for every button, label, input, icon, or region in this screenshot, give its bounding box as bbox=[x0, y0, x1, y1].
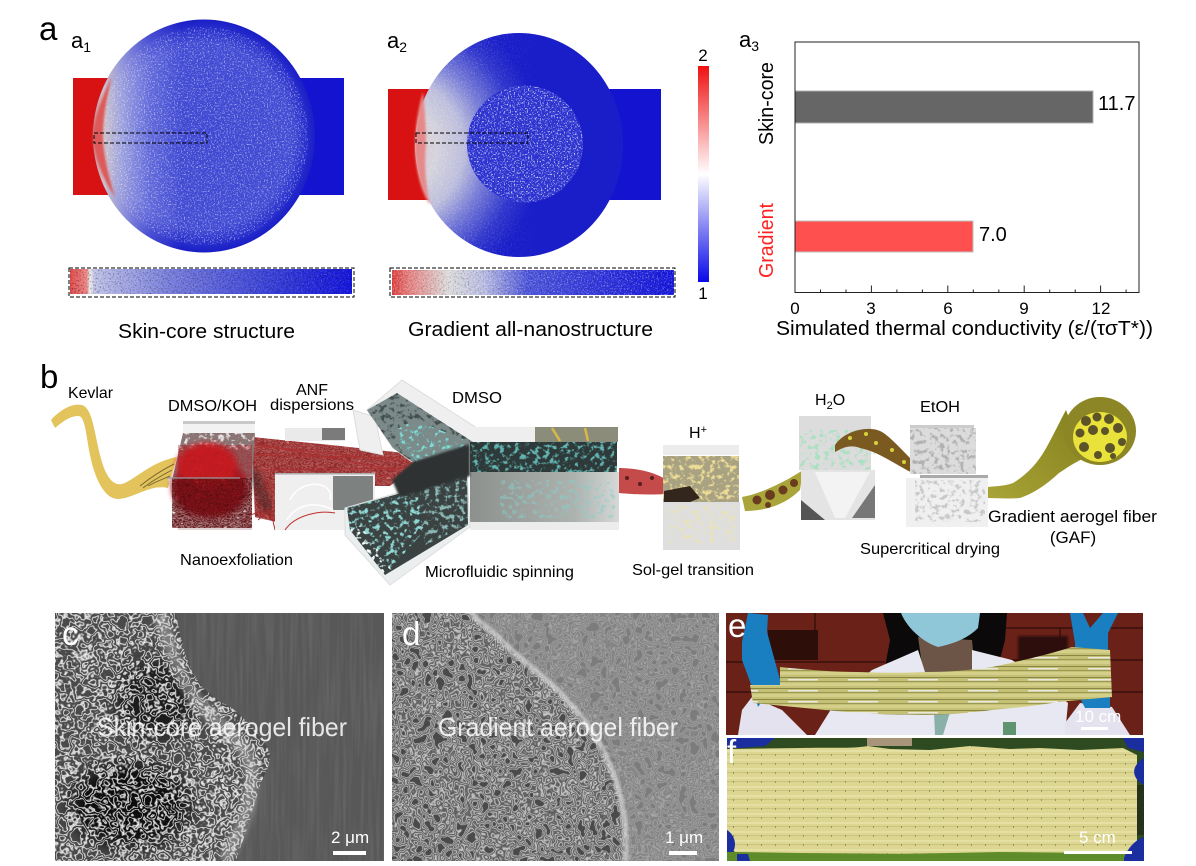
process labels: DMSO/KOH bbox=[168, 398, 257, 415]
scale label: 2 μm bbox=[331, 828, 369, 847]
blue glove corners bbox=[727, 738, 1144, 861]
subpanel a1 skin-core simulation bbox=[69, 20, 354, 343]
process labels: H bbox=[689, 425, 701, 442]
brick wall bbox=[726, 613, 1143, 735]
grass strip bbox=[727, 852, 1144, 861]
x axis title: Simulated thermal conductivity (ε/(τσT*)) bbox=[776, 318, 1153, 340]
caption gradient: Gradient all-nanostructure bbox=[408, 319, 653, 341]
kevlar yarn bbox=[51, 405, 177, 499]
scale bar bbox=[1064, 851, 1132, 854]
water exchange box bbox=[799, 416, 875, 520]
scale label: 1 μm bbox=[665, 828, 703, 847]
dashed selection box bbox=[416, 133, 528, 143]
dashed selection box bbox=[94, 133, 207, 143]
scale label: 10 cm bbox=[1075, 707, 1121, 726]
face mask bbox=[901, 613, 980, 647]
fiber cross section bbox=[1073, 412, 1127, 462]
enlarged strip bbox=[390, 268, 675, 297]
colour scale: 1 bbox=[698, 284, 708, 303]
outer fine layer bbox=[470, 613, 720, 861]
label a3: a bbox=[739, 27, 751, 52]
skin-core disc bbox=[93, 20, 315, 252]
porous core region bbox=[55, 613, 275, 861]
panel letter e: e bbox=[728, 607, 746, 644]
scale label: 5 cm bbox=[1079, 828, 1116, 847]
process labels: H bbox=[815, 392, 827, 409]
label a1: 1 bbox=[83, 39, 91, 55]
process labels: EtOH bbox=[920, 399, 960, 416]
value labels: 11.7 bbox=[1098, 93, 1135, 115]
lower DMSO inlet arm bbox=[345, 473, 470, 585]
colour scale: 2 bbox=[698, 46, 708, 65]
coat cuffs bbox=[738, 697, 1130, 735]
process labels: (GAF) bbox=[1050, 528, 1096, 547]
overlay label: Skin-core aerogel fiber bbox=[97, 712, 347, 742]
label a2: 2 bbox=[399, 39, 407, 55]
panel c: SEM skin-core bbox=[55, 613, 384, 861]
process labels: dispersions bbox=[270, 397, 354, 414]
gradient bar bbox=[795, 221, 973, 252]
panel letter d: d bbox=[402, 615, 420, 652]
x tick labels: 9 bbox=[1019, 299, 1029, 318]
sol-gel H+ box bbox=[663, 445, 740, 550]
hot red block bbox=[73, 78, 118, 195]
inner core circle bbox=[467, 85, 583, 203]
cold blue block bbox=[295, 78, 344, 195]
skin-core bar bbox=[795, 91, 1093, 123]
process labels: + bbox=[701, 424, 707, 436]
panel e: stretched fiber photo bbox=[726, 607, 1143, 735]
panel b: fabrication process bbox=[40, 358, 1157, 585]
ANF channel glass bbox=[275, 428, 375, 530]
scale bar bbox=[333, 851, 366, 855]
colour scale bbox=[698, 46, 709, 303]
panel letter c: c bbox=[62, 615, 78, 652]
subpanel a3 bar chart bbox=[739, 27, 1153, 340]
y label skin-core: Skin-core bbox=[756, 62, 778, 145]
process labels: Sol-gel transition bbox=[632, 562, 754, 579]
gel fiber between H+ and water bbox=[742, 470, 803, 511]
y label gradient: Gradient bbox=[756, 203, 778, 278]
x tick labels: 3 bbox=[866, 299, 876, 318]
x tick labels: 0 bbox=[790, 299, 800, 318]
ethanol box bbox=[906, 425, 988, 527]
cold blue block bbox=[605, 89, 661, 200]
hair bbox=[883, 613, 1007, 667]
main spinning channel bbox=[470, 427, 619, 530]
panel letter b: b bbox=[40, 358, 58, 395]
nanoexfoliation glass box bbox=[167, 421, 255, 530]
x tick labels: 6 bbox=[943, 299, 953, 318]
scale bar bbox=[1081, 727, 1108, 730]
process labels bbox=[68, 382, 1157, 581]
panel d: SEM gradient bbox=[392, 613, 720, 861]
dense skin region bbox=[176, 613, 384, 861]
caption skin-core: Skin-core structure bbox=[118, 321, 295, 343]
panel a: thermal simulation bbox=[39, 10, 1153, 343]
porous network bbox=[392, 613, 626, 861]
background bbox=[727, 738, 1144, 861]
process labels: 2 bbox=[827, 400, 833, 412]
process labels: Supercritical drying bbox=[860, 541, 1000, 558]
lab coat bbox=[815, 650, 1068, 735]
label a1: a bbox=[71, 28, 83, 53]
gradient disc bbox=[415, 33, 623, 257]
emerging red gel fiber bbox=[619, 468, 684, 495]
panel f: woven fabric photo bbox=[727, 733, 1144, 861]
red crescent bbox=[93, 76, 115, 197]
hot red block bbox=[388, 89, 433, 200]
scale bar bbox=[669, 851, 697, 855]
process labels: Microfluidic spinning bbox=[425, 564, 574, 581]
panel letter f: f bbox=[727, 733, 737, 770]
fiber bundle bbox=[750, 647, 1112, 715]
process labels: ANF bbox=[296, 382, 328, 399]
microfluidic junction bbox=[392, 444, 470, 498]
twisted gel fiber bbox=[835, 429, 925, 474]
enlarged strip bbox=[69, 268, 354, 297]
process labels: Gradient aerogel fiber bbox=[988, 507, 1157, 526]
label a3: 3 bbox=[751, 38, 759, 54]
upper DMSO inlet arm bbox=[353, 380, 477, 472]
label a2: a bbox=[387, 28, 399, 53]
coat badge bbox=[934, 714, 950, 735]
bright boundary bbox=[471, 613, 626, 861]
subpanel a2 gradient simulation bbox=[387, 28, 675, 341]
bright boundary bbox=[160, 613, 252, 861]
process labels: O bbox=[833, 392, 845, 409]
right glove bbox=[1070, 613, 1118, 708]
red nanofiber bundle bbox=[250, 437, 417, 530]
neck bbox=[918, 637, 975, 672]
finished aerogel fiber bbox=[988, 397, 1136, 498]
right fringe bbox=[1137, 785, 1144, 835]
process labels: Nanoexfoliation bbox=[180, 552, 293, 569]
left glove bbox=[742, 613, 782, 707]
overlay label: Gradient aerogel fiber bbox=[438, 712, 678, 742]
process labels: DMSO bbox=[452, 390, 502, 407]
axes frame and ticks bbox=[795, 42, 1139, 292]
process labels: Kevlar bbox=[68, 385, 114, 402]
x tick labels bbox=[790, 299, 1110, 318]
x tick labels: 12 bbox=[1092, 299, 1110, 318]
subpanel a3 bar chart: 7.0 bbox=[979, 224, 1007, 246]
panel letter a: a bbox=[39, 10, 58, 47]
woven fiber sheet bbox=[727, 746, 1137, 854]
